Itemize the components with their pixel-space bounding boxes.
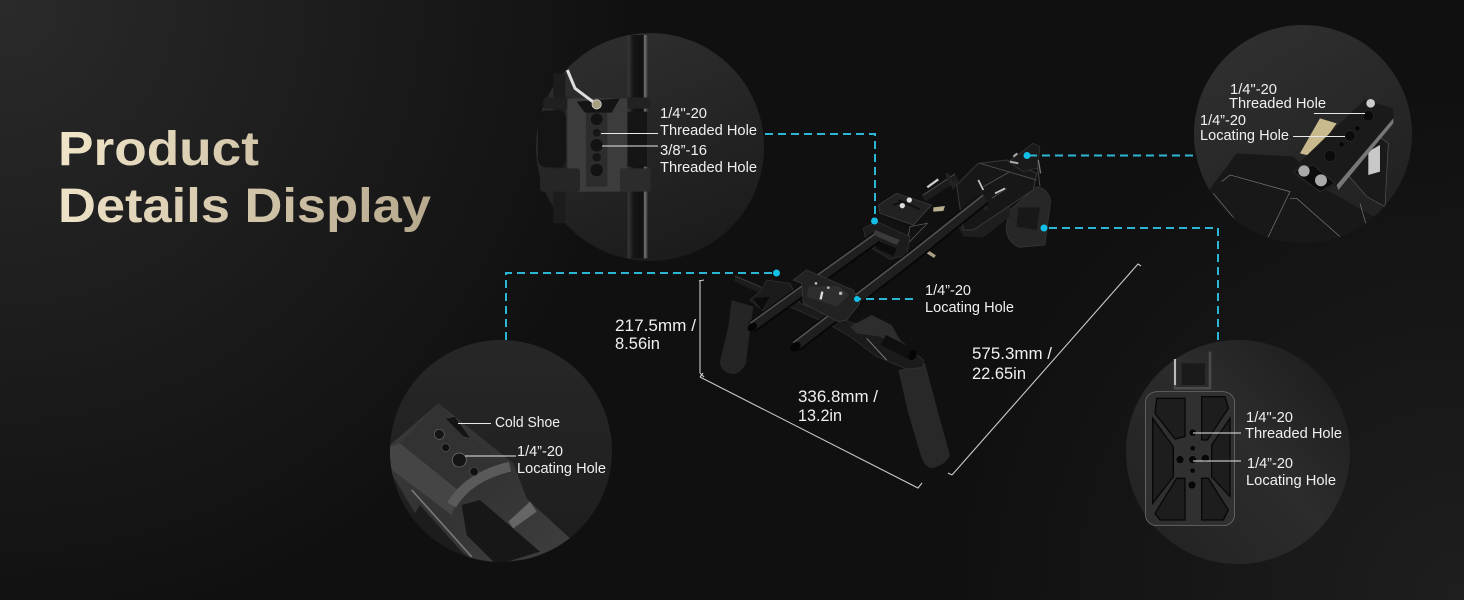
width value: 336.8mm / <box>798 388 878 406</box>
width value: 13.2in <box>798 407 842 425</box>
callout: rod clamp locating hole <box>854 283 1014 316</box>
panel: cold shoe detail circle <box>388 340 612 565</box>
rear rails <box>923 173 987 210</box>
shoulder pad <box>957 143 1051 247</box>
callout: rod clamp connector <box>765 134 878 224</box>
label: 3/8"-16 threaded hole: 3/8”-16 <box>660 143 707 159</box>
right grip <box>898 363 950 468</box>
dimension: height <box>615 280 704 377</box>
cross bar and grip blocks <box>735 276 923 369</box>
title: Product <box>58 123 259 176</box>
panel: shoulder pad detail circle <box>1126 340 1350 564</box>
callout: baseplate connector <box>1024 152 1193 159</box>
product: shoulder rig <box>720 143 1051 468</box>
height value: 217.5mm / <box>615 317 696 335</box>
callout: cold shoe connector <box>506 270 780 340</box>
label: locating hole <box>1200 113 1289 144</box>
label: 1/4"-20 threaded hole <box>660 106 757 139</box>
label: locating hole <box>925 283 1014 316</box>
label: cold shoe: Cold Shoe <box>495 415 560 431</box>
callout: shoulder pad connector <box>1040 224 1218 340</box>
label: threaded hole <box>1245 410 1342 442</box>
leader lines <box>601 134 658 146</box>
length value <box>972 345 1052 383</box>
label: locating hole: 1/4”-20 <box>925 283 971 299</box>
label: locating hole <box>517 444 606 477</box>
label: threaded hole <box>1229 82 1326 112</box>
height value: 8.56in <box>615 335 660 353</box>
label: locating hole: Locating Hole <box>925 300 1014 316</box>
label: 1/4"-20 threaded hole: 1/4"-20 <box>660 106 707 122</box>
label: 3/8"-16 threaded hole <box>660 143 757 176</box>
length value: 22.65in <box>972 365 1026 383</box>
label: threaded hole: Threaded Hole <box>1229 96 1326 112</box>
leader lines <box>458 424 516 456</box>
left grip <box>720 300 753 374</box>
label: locating hole: Locating Hole <box>517 461 606 477</box>
quick release mount <box>863 193 945 259</box>
panel: rod clamp detail circle <box>536 33 764 261</box>
height value <box>615 317 696 353</box>
label: locating hole <box>1246 456 1336 489</box>
label: threaded hole: Threaded Hole <box>1245 426 1342 442</box>
dimension: width <box>700 373 922 488</box>
label: 3/8"-16 threaded hole: Threaded Hole <box>660 160 757 176</box>
label: locating hole: 1/4”-20 <box>1200 113 1246 129</box>
leader lines <box>1293 114 1365 136</box>
shoulder plate photo <box>1145 352 1235 526</box>
length value: 575.3mm / <box>972 345 1052 363</box>
panel: top right baseplate detail circle <box>1194 25 1412 250</box>
title <box>58 123 431 233</box>
baseplate photo <box>1207 99 1393 250</box>
label: threaded hole: 1/4"-20 <box>1246 410 1293 426</box>
label: locating hole: Locating Hole <box>1246 473 1336 489</box>
width value <box>798 388 878 425</box>
label: threaded hole: 1/4"-20 <box>1230 82 1277 98</box>
title: Details Display <box>58 180 431 233</box>
rod clamp <box>793 270 860 322</box>
label: locating hole: Locating Hole <box>1200 128 1289 144</box>
label: locating hole: 1/4”-20 <box>1247 456 1293 472</box>
label: 1/4"-20 threaded hole: Threaded Hole <box>660 123 757 139</box>
grip block photo <box>388 403 572 565</box>
leader lines <box>1193 433 1241 461</box>
steel rods <box>746 195 985 353</box>
label: locating hole: 1/4”-20 <box>517 444 563 460</box>
dimension: length <box>948 264 1141 475</box>
clamp photo <box>538 35 651 258</box>
